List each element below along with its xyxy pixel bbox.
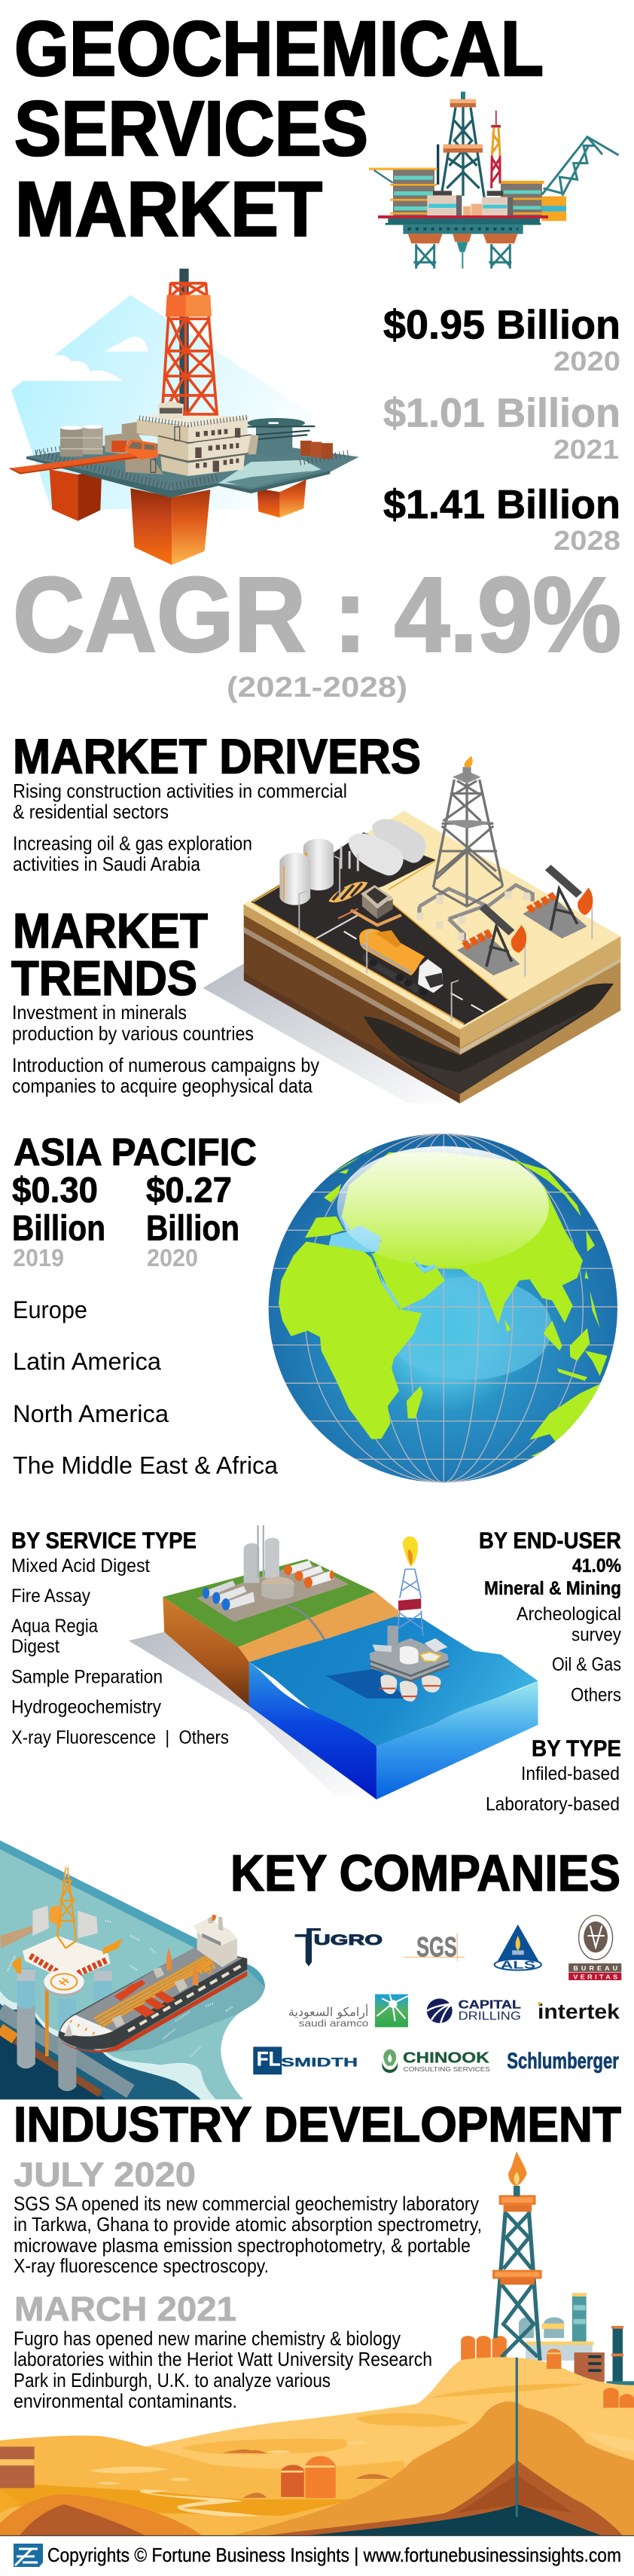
panel: by end-user: survey	[572, 1624, 621, 1645]
text: other regions: Latin America	[13, 1348, 161, 1375]
icon: Fortune Business Insights logo	[14, 2544, 43, 2567]
text: March 2021 development: Park in Edinburgh, U.K. to analyze various	[14, 2369, 331, 2391]
date: July 2020: JULY 2020	[14, 2156, 196, 2193]
illustration: desert landscape with oil reservoir	[0, 2349, 634, 2536]
logo: FLSmidth: SMIDTH	[281, 2056, 358, 2069]
stat: Asia Pacific 2019: 2019	[13, 1244, 64, 1271]
panel: by service type: Hydrogeochemistry	[11, 1696, 161, 1717]
illustration: drilling tower and refinery	[461, 2151, 634, 2388]
logo: Bureau Veritas: BUREAU	[573, 1964, 617, 1972]
logos: key companies	[253, 1915, 621, 2074]
text: market drivers list: & residential sectors	[13, 800, 169, 823]
text: March 2021 development: environmental contaminants.	[14, 2389, 237, 2412]
stat: Asia Pacific 2019	[12, 1170, 105, 1271]
stat: 2028 market size	[383, 482, 620, 556]
text: July 2020 development: in Tarkwa, Ghana to provide atomic absorption spectrometry,	[14, 2213, 482, 2236]
panel: by type: BY TYPE	[532, 1735, 621, 1761]
title	[14, 5, 544, 252]
panel: by end-user: Others	[571, 1684, 621, 1705]
stat: 2020 market size: 2020	[553, 346, 620, 377]
panel: by service type: Fire Assay	[11, 1586, 90, 1607]
title: MARKET	[15, 166, 322, 252]
panel: by service type: Aqua Regia	[11, 1616, 98, 1637]
stat: 2021 market size: $1.01 Billion	[383, 390, 620, 435]
logo: Chinook: CONSULTING SERVICES	[404, 2066, 490, 2073]
text: market drivers list: Increasing oil & gas exploration	[13, 832, 252, 854]
panel: by end-user: Archeological	[517, 1604, 621, 1625]
logo: Bureau Veritas: VERITAS	[573, 1973, 617, 1980]
stat: Asia Pacific 2020	[146, 1170, 239, 1271]
stat: 2020 market size	[383, 303, 620, 377]
stat: Asia Pacific 2019: Billion	[12, 1208, 105, 1247]
panel: by end-user: Mineral & Mining	[484, 1578, 621, 1599]
logo: Saudi Aramco: أرامكو السعودية	[288, 2004, 368, 2020]
panel: by type: Laboratory-based	[486, 1794, 620, 1815]
text: market trends list: production by various countries	[12, 1022, 254, 1045]
panel: by type	[486, 1735, 621, 1815]
logo: Fugro	[295, 1928, 383, 1967]
logo: ALS	[495, 1924, 541, 1972]
logo: Capital Drilling: DRILLING	[459, 2010, 521, 2023]
illustration: offshore rig and tanker	[0, 1840, 265, 2099]
stat: Asia Pacific 2020: $0.27	[146, 1170, 232, 1210]
logo: Capital Drilling	[427, 1998, 521, 2023]
text: market trends list: companies to acquire geophysical data	[12, 1074, 312, 1097]
logo: ALS: ALS	[501, 1959, 535, 1972]
panel: by service type: Sample Preparation	[11, 1666, 163, 1687]
heading: market trends	[11, 903, 208, 1006]
footer divider	[0, 2535, 634, 2537]
logo: FLSmidth	[253, 2046, 358, 2074]
logo: FLSmidth: FL	[257, 2047, 281, 2071]
illustration: land and sea block with offshore rig	[129, 1525, 538, 1799]
text: market drivers list: activities in Saudi Arabia	[13, 853, 200, 875]
title: GEOCHEMICAL	[14, 5, 544, 92]
heading: market trends: MARKET	[13, 903, 208, 958]
panel: by end-user: 41.0%	[572, 1555, 621, 1576]
panel: by end-user: Oil & Gas	[552, 1654, 621, 1675]
heading: market trends: TRENDS	[11, 951, 197, 1006]
text: other regions: North America	[13, 1400, 169, 1427]
illustration: globe	[264, 1134, 623, 1482]
logo: Capital Drilling: CAPITAL	[459, 1999, 521, 2012]
logo: Intertek: intertek	[538, 2000, 620, 2024]
icon: teal offshore rig	[369, 92, 619, 269]
heading: market drivers: MARKET DRIVERS	[13, 729, 421, 783]
illustration: orange offshore platform	[10, 269, 359, 565]
logo: SGS: SGS	[416, 1932, 457, 1963]
stat: Asia Pacific 2020: 2020	[147, 1244, 198, 1271]
logo: Bureau Veritas	[568, 1915, 621, 1980]
panel: by service type: Mixed Acid Digest	[11, 1555, 150, 1576]
stat: 2021 market size	[383, 390, 620, 465]
stat: Asia Pacific 2020: Billion	[146, 1208, 239, 1247]
stat: 2028 market size: $1.41 Billion	[383, 482, 620, 527]
text: market drivers list: Rising construction activities in commercial	[13, 780, 347, 802]
stat: 2021 market size: 2021	[553, 434, 619, 465]
text: July 2020 development	[14, 2192, 482, 2277]
heading: Asia Pacific: ASIA PACIFIC	[14, 1131, 257, 1174]
panel: by service type	[11, 1528, 229, 1748]
illustration: isometric oil field block	[203, 755, 620, 1103]
text: other regions	[13, 1296, 278, 1479]
title: SERVICES	[14, 85, 368, 172]
panel: by type: Infiled-based	[521, 1763, 620, 1784]
stat: 2020 market size: $0.95 Billion	[383, 303, 620, 348]
text: March 2021 development: Fugro has opened new marine chemistry & biology	[14, 2327, 401, 2350]
panel: by service type: Digest	[11, 1636, 59, 1657]
text: July 2020 development: microwave plasma emission spectrophotometry, & portable	[14, 2234, 471, 2257]
text: market trends list: Investment in minerals	[12, 1001, 187, 1024]
panel: by end-user	[479, 1528, 621, 1705]
text: other regions: The Middle East & Africa	[13, 1452, 278, 1479]
text: market drivers list	[13, 780, 347, 875]
date: March 2021: MARCH 2021	[14, 2290, 236, 2328]
logo: Chinook	[382, 2050, 490, 2073]
logo: SGS	[404, 1932, 465, 1963]
text: market trends list	[12, 1001, 319, 1097]
text: market trends list: Introduction of numerous campaigns by	[12, 1054, 319, 1076]
stat: Asia Pacific 2019: $0.30	[12, 1170, 98, 1210]
text: July 2020 development: SGS SA opened its new commercial geochemistry laboratory	[14, 2192, 479, 2214]
logo: Saudi Aramco	[288, 1995, 408, 2029]
logo: Saudi Aramco: saudi aramco	[299, 2018, 368, 2029]
text: March 2021 development: laboratories within the Heriot Watt University Research	[14, 2348, 432, 2370]
logo: Chinook: CHINOOK	[403, 2050, 489, 2066]
stat: 2028 market size: 2028	[553, 525, 620, 556]
text: July 2020 development: X-ray fluorescence spectroscopy.	[14, 2254, 269, 2277]
text: other regions: Europe	[13, 1296, 87, 1323]
text: March 2021 development	[14, 2327, 432, 2412]
panel: by service type: BY SERVICE TYPE	[11, 1528, 197, 1553]
panel: by service type: X-ray Fluorescence | Others	[11, 1727, 229, 1748]
CAGR period: (2021-2028)	[227, 672, 407, 704]
logo: Fugro: UGRO	[314, 1932, 383, 1949]
